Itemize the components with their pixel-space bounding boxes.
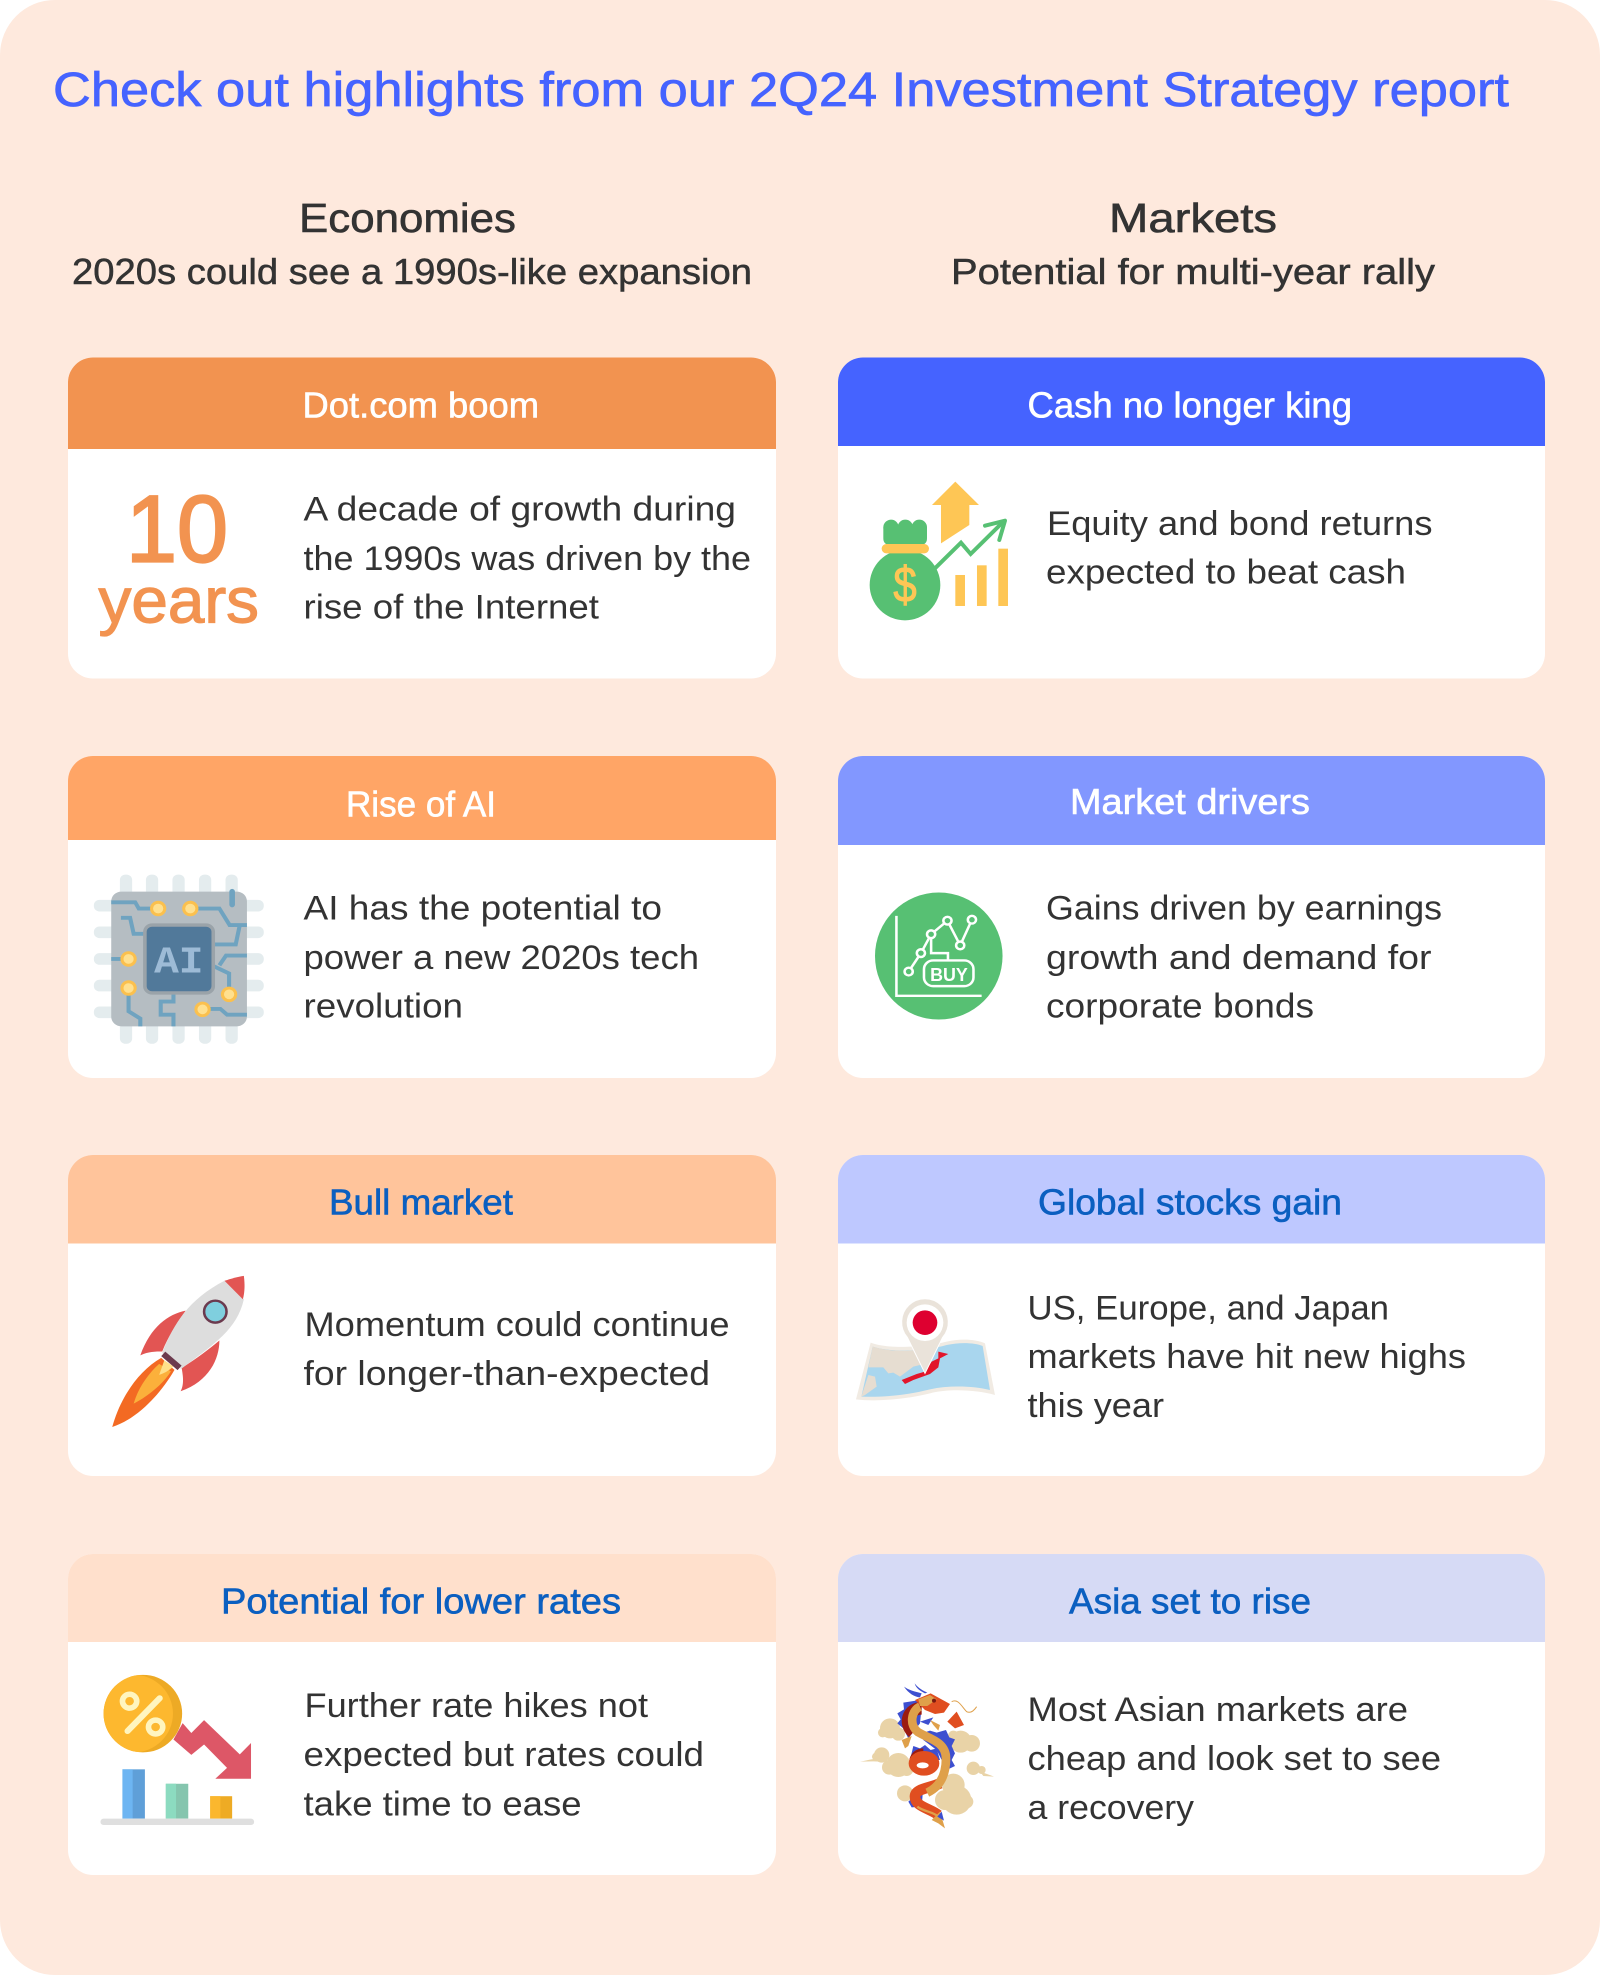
- header: Potential for lower rates: Potential for lower rates: [221, 1580, 621, 1622]
- column heading: economies: [72, 195, 752, 292]
- body text: Potential for lower rates: Further rate hikes not: [304, 1687, 649, 1725]
- body text: Cash no longer king: Equity and bond returns: [1047, 505, 1432, 543]
- panel: Rise of AI: [68, 756, 776, 1078]
- body text: Potential for lower rates: take time to ease: [304, 1786, 582, 1824]
- header: Rise of AI: [68, 756, 776, 840]
- icon: map of Japan with pin: [856, 1299, 995, 1400]
- column heading: economies: 2020s could see a 1990s-like expansion: [72, 251, 752, 292]
- header: Global stocks gain: Global stocks gain: [1038, 1182, 1342, 1222]
- panel: Dot.com boom: [68, 358, 776, 678]
- body text: Rise of AI: power a new 2020s tech: [304, 939, 699, 977]
- panel: Potential for lower rates: [68, 1554, 776, 1875]
- body text: Market drivers: [1046, 890, 1442, 1026]
- body text: Potential for lower rates: expected but rates could: [304, 1736, 704, 1774]
- panel: Bull market: [68, 1155, 776, 1476]
- body text: Rise of AI: [304, 890, 699, 1026]
- body text: Dot.com boom: rise of the Internet: [304, 588, 600, 626]
- header: Market drivers: Market drivers: [1070, 781, 1310, 822]
- header: Asia set to rise: Asia set to rise: [1069, 1580, 1311, 1622]
- column heading: markets: Potential for multi-year rally: [951, 251, 1435, 292]
- panel: Cash no longer king: [838, 358, 1545, 678]
- header: Dot.com boom: [68, 358, 776, 449]
- title: Check out highlights from our 2Q24 Investment Strategy report: [53, 64, 1509, 117]
- icon: rocket: [112, 1276, 245, 1427]
- big number: 10 years: 10: [126, 476, 228, 582]
- icon: AI chip: AI: [154, 941, 204, 984]
- body text: Dot.com boom: [304, 490, 751, 626]
- icon: buy chart: BUY: [930, 965, 968, 986]
- panel: Market drivers: [838, 756, 1545, 1078]
- icon: falling rates: [94, 1675, 254, 1825]
- body text: Cash no longer king: expected to beat cash: [1046, 554, 1406, 592]
- icon: money bag and growth: $: [893, 557, 917, 613]
- body text: Asia set to rise: a recovery: [1028, 1789, 1194, 1827]
- body text: Asia set to rise: Most Asian markets are: [1028, 1691, 1408, 1729]
- body text: Bull market: [304, 1306, 730, 1393]
- body text: Global stocks gain: this year: [1028, 1387, 1164, 1425]
- body text: Market drivers: corporate bonds: [1046, 988, 1314, 1026]
- header: Cash no longer king: Cash no longer king: [1028, 384, 1352, 426]
- icon: AI chip: [94, 875, 264, 1044]
- body text: Dot.com boom: the 1990s was driven by the: [304, 540, 751, 578]
- body text: Cash no longer king: [1046, 505, 1432, 592]
- body text: Rise of AI: AI has the potential to: [304, 890, 662, 928]
- column heading: markets: Markets: [1109, 195, 1277, 241]
- header: Cash no longer king: [838, 358, 1545, 446]
- panel: Asia set to rise: [838, 1554, 1545, 1875]
- body text: Rise of AI: revolution: [304, 988, 463, 1026]
- body text: Global stocks gain: markets have hit new highs: [1028, 1338, 1466, 1376]
- header: Bull market: [68, 1155, 776, 1244]
- big number: 10 years: years: [98, 564, 259, 636]
- header: Potential for lower rates: [68, 1554, 776, 1642]
- body text: Global stocks gain: US, Europe, and Japan: [1028, 1290, 1389, 1328]
- body text: Dot.com boom: A decade of growth during: [304, 490, 736, 528]
- icon: buy chart: [875, 893, 1003, 1020]
- header: Market drivers: [838, 756, 1545, 845]
- body text: Asia set to rise: [1028, 1691, 1441, 1827]
- header: Rise of AI: Rise of AI: [346, 784, 496, 824]
- icon: dragon: [860, 1683, 994, 1828]
- body text: Potential for lower rates: [304, 1687, 704, 1824]
- body text: Asia set to rise: cheap and look set to see: [1028, 1740, 1441, 1778]
- big number: 10 years: [98, 476, 259, 636]
- body text: Global stocks gain: [1028, 1290, 1466, 1425]
- header: Dot.com boom: Dot.com boom: [302, 384, 539, 426]
- body text: Bull market: for longer-than-expected: [304, 1355, 710, 1393]
- header: Global stocks gain: [838, 1155, 1545, 1244]
- panel: Global stocks gain: [838, 1155, 1545, 1476]
- body text: Market drivers: Gains driven by earnings: [1046, 890, 1442, 928]
- column heading: markets: [951, 195, 1435, 292]
- body text: Bull market: Momentum could continue: [304, 1306, 730, 1344]
- header: Bull market: Bull market: [329, 1182, 513, 1222]
- column heading: economies: Economies: [299, 195, 516, 241]
- header: Asia set to rise: [838, 1554, 1545, 1642]
- icon: money bag and growth: [870, 482, 1008, 620]
- body text: Market drivers: growth and demand for: [1046, 939, 1432, 977]
